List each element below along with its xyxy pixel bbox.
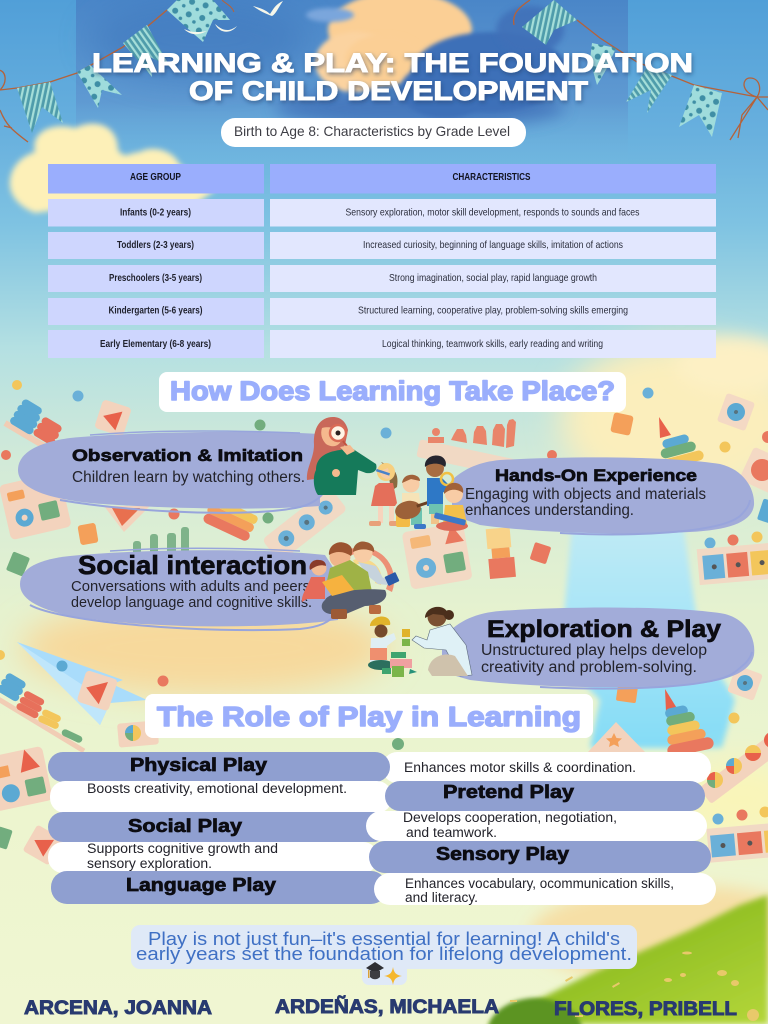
toy: abacus upper left: [5, 397, 64, 447]
toy: tile ring right: [717, 393, 755, 431]
table header row: CHARACTERISTICS: [452, 172, 531, 183]
table row: kindergarten: [48, 298, 716, 325]
panel: social interaction: [20, 548, 338, 630]
card: enhances motor skills: Enhances motor skills & coordination.: [404, 760, 636, 775]
bunting left: [0, 0, 234, 142]
card: develops cooperation: [366, 810, 707, 841]
card: language play: [51, 871, 387, 904]
card: physical play: Physical Play: [130, 755, 267, 775]
callout: closing message: Play is not just fun–it's essential for learning! A child's: [148, 929, 620, 949]
toy: shape board lower left: [0, 746, 53, 812]
toy: star house: [588, 722, 645, 752]
panel: exploration and play: Exploration & Play: [487, 616, 722, 643]
card: sensory play: [369, 841, 711, 873]
panel: observation and imitation: [18, 431, 324, 513]
authors: [24, 996, 737, 1020]
author: flores: FLORES, PRIBELL: [554, 999, 737, 1020]
toy: tile right edge: [739, 447, 768, 494]
toy: shape board centre: [402, 522, 473, 590]
illustration: father reading to children: [302, 541, 400, 619]
toy: shelf box right: [697, 542, 768, 585]
table row: kindergarten: Kindergarten (5-6 years): [108, 304, 202, 316]
toy: shelf box lower right: [706, 822, 768, 863]
toy: coloured dots: [0, 380, 768, 824]
table: age groups and characteristics: [48, 164, 716, 358]
panel: hands-on experience: Hands-On Experience: [495, 467, 697, 485]
table row: preschoolers: [48, 265, 716, 292]
toy: green pegs: [133, 527, 189, 555]
table row: preschoolers: Strong imagination, social play, rapid language growth: [389, 272, 597, 284]
panel: social interaction: Conversations with adults and peers: [71, 578, 310, 595]
panel: hands-on experience: Engaging with objects and materials: [465, 486, 706, 503]
child with hat: [368, 617, 396, 670]
child: boy in blue: [425, 455, 453, 524]
table row: early elementary: [48, 330, 716, 358]
heading: how does learning take place: How Does Learning Take Place?: [170, 376, 615, 406]
illustration: caregiver and child with blocks: [368, 607, 472, 677]
toy: triangle tile lower left: [23, 825, 63, 865]
table row: infants: [48, 199, 716, 226]
title: OF CHILD DEVELOPMENT: [189, 76, 589, 106]
child: boy behind: [353, 541, 400, 586]
table row: toddlers: Toddlers (2-3 years): [117, 239, 194, 251]
table row: early elementary: Logical thinking, teamwork skills, early reading and writing: [382, 338, 603, 350]
table row: toddlers: [48, 232, 716, 259]
table row: early elementary: Early Elementary (6-8 years): [100, 338, 211, 350]
card: social play: [48, 812, 388, 842]
icon: graduation cap: [366, 962, 384, 979]
author: ardenas: ARDEÑAS, MICHAELA: [275, 996, 499, 1018]
illustration: children playing music: [369, 455, 468, 531]
panel: hands-on experience: enhances understanding.: [465, 502, 634, 519]
card: pretend play: [385, 781, 705, 811]
card: language play: Language Play: [126, 875, 276, 895]
panel: social interaction: Social interaction: [78, 550, 307, 580]
card: enhances motor skills: [382, 752, 711, 783]
bunting right: [514, 0, 768, 140]
toy: pie tile: [117, 720, 159, 748]
heading: how does learning take place: [159, 372, 626, 412]
card: supports cognitive growth: Supports cognitive growth and: [87, 841, 278, 856]
panel: exploration and play: [442, 608, 754, 689]
toy: peg beam: [416, 419, 526, 479]
toy: stacking rings upper right: [659, 417, 705, 470]
card: boosts creativity: Boosts creativity, emotional development.: [87, 781, 347, 796]
toy: paper plane: [17, 642, 147, 725]
illustration: woman with magnifying glass: [307, 417, 377, 495]
toy: orange pillar: [486, 527, 516, 579]
panel: hands-on experience: [452, 457, 754, 534]
toy: abacus lower left: [0, 671, 84, 751]
callout: closing message: [131, 925, 637, 985]
heading: the role of play in learning: [145, 694, 593, 738]
child: boy with guitar: [393, 475, 441, 529]
subtitle pill: Birth to Age 8: Characteristics by Grade Level: [234, 123, 510, 139]
toy: triangle tile on plane: [77, 670, 118, 711]
table header row: [48, 164, 716, 194]
toy: pie plank: [699, 728, 768, 804]
panel: exploration and play: creativity and problem-solving.: [481, 659, 697, 676]
card: develops cooperation: Develops cooperation, negotiation,: [403, 810, 617, 825]
callout: closing message: early years set the foundation for lifelong development.: [136, 944, 632, 964]
title: LEARNING & PLAY: THE FOUNDATION: [92, 48, 693, 78]
toy: ring stack under first bubble: [202, 496, 259, 542]
toys scattered in the background: [0, 380, 768, 865]
toy: orange and coloured squares: [0, 412, 768, 850]
heading: the role of play in learning: The Role of Play in Learning: [157, 701, 581, 732]
author: arcena: ARCENA, JOANNA: [24, 998, 212, 1019]
toy: hole plank: [262, 487, 348, 563]
table row: infants: Infants (0-2 years): [120, 206, 191, 218]
toy: small orange square: [616, 684, 638, 703]
table row: preschoolers: Preschoolers (3-5 years): [109, 272, 202, 284]
caregiver: [412, 607, 472, 676]
toy: stacking rings lower right: [664, 689, 715, 758]
child: girl with flute: [369, 462, 401, 526]
table header row: AGE GROUP: [130, 172, 181, 183]
toy: tile ring lower right: [727, 665, 763, 701]
panel: observation and imitation: Observation & Imitation: [72, 446, 303, 465]
icon: sparkles: [384, 967, 402, 985]
card: boosts creativity: [50, 781, 392, 813]
table row: infants: Sensory exploration, motor skill development, responds to sounds and faces: [346, 206, 640, 218]
toy: tile triangle under first bubble: [104, 506, 150, 532]
panel: exploration and play: Unstructured play helps develop: [481, 642, 707, 659]
card: supports cognitive growth: [48, 841, 378, 873]
card: enhances vocabulary: and literacy.: [405, 890, 478, 905]
block stack: [382, 629, 417, 677]
card: supports cognitive growth: sensory exploration.: [87, 856, 212, 871]
father: [322, 542, 386, 619]
toy: shape board left: [0, 472, 72, 540]
panel: social interaction: develop language and cognitive skills.: [71, 594, 312, 611]
toy: triangle tile: [94, 399, 132, 437]
card: pretend play: Pretend Play: [443, 782, 574, 802]
table row: kindergarten: Structured learning, cooperative play, problem-solving skills emerging: [358, 304, 628, 316]
birds: [184, 1, 283, 34]
card: sensory play: Sensory Play: [436, 844, 569, 864]
title: [92, 48, 693, 106]
panel: observation and imitation: Children learn by watching others.: [72, 469, 305, 486]
table row: toddlers: Increased curiosity, beginning of language skills, imitation of actions: [363, 239, 623, 251]
card: enhances vocabulary: [374, 873, 716, 905]
card: develops cooperation: and teamwork.: [406, 825, 497, 840]
play type grid: [48, 752, 716, 905]
card: social play: Social Play: [128, 816, 242, 836]
subtitle pill: [221, 118, 526, 147]
card: physical play: [48, 752, 390, 782]
card: enhances vocabulary: Enhances vocabulary, ocommunication skills,: [405, 876, 674, 891]
child: girl with keyboard: [434, 483, 468, 531]
child: girl on lap and book: [302, 560, 354, 602]
